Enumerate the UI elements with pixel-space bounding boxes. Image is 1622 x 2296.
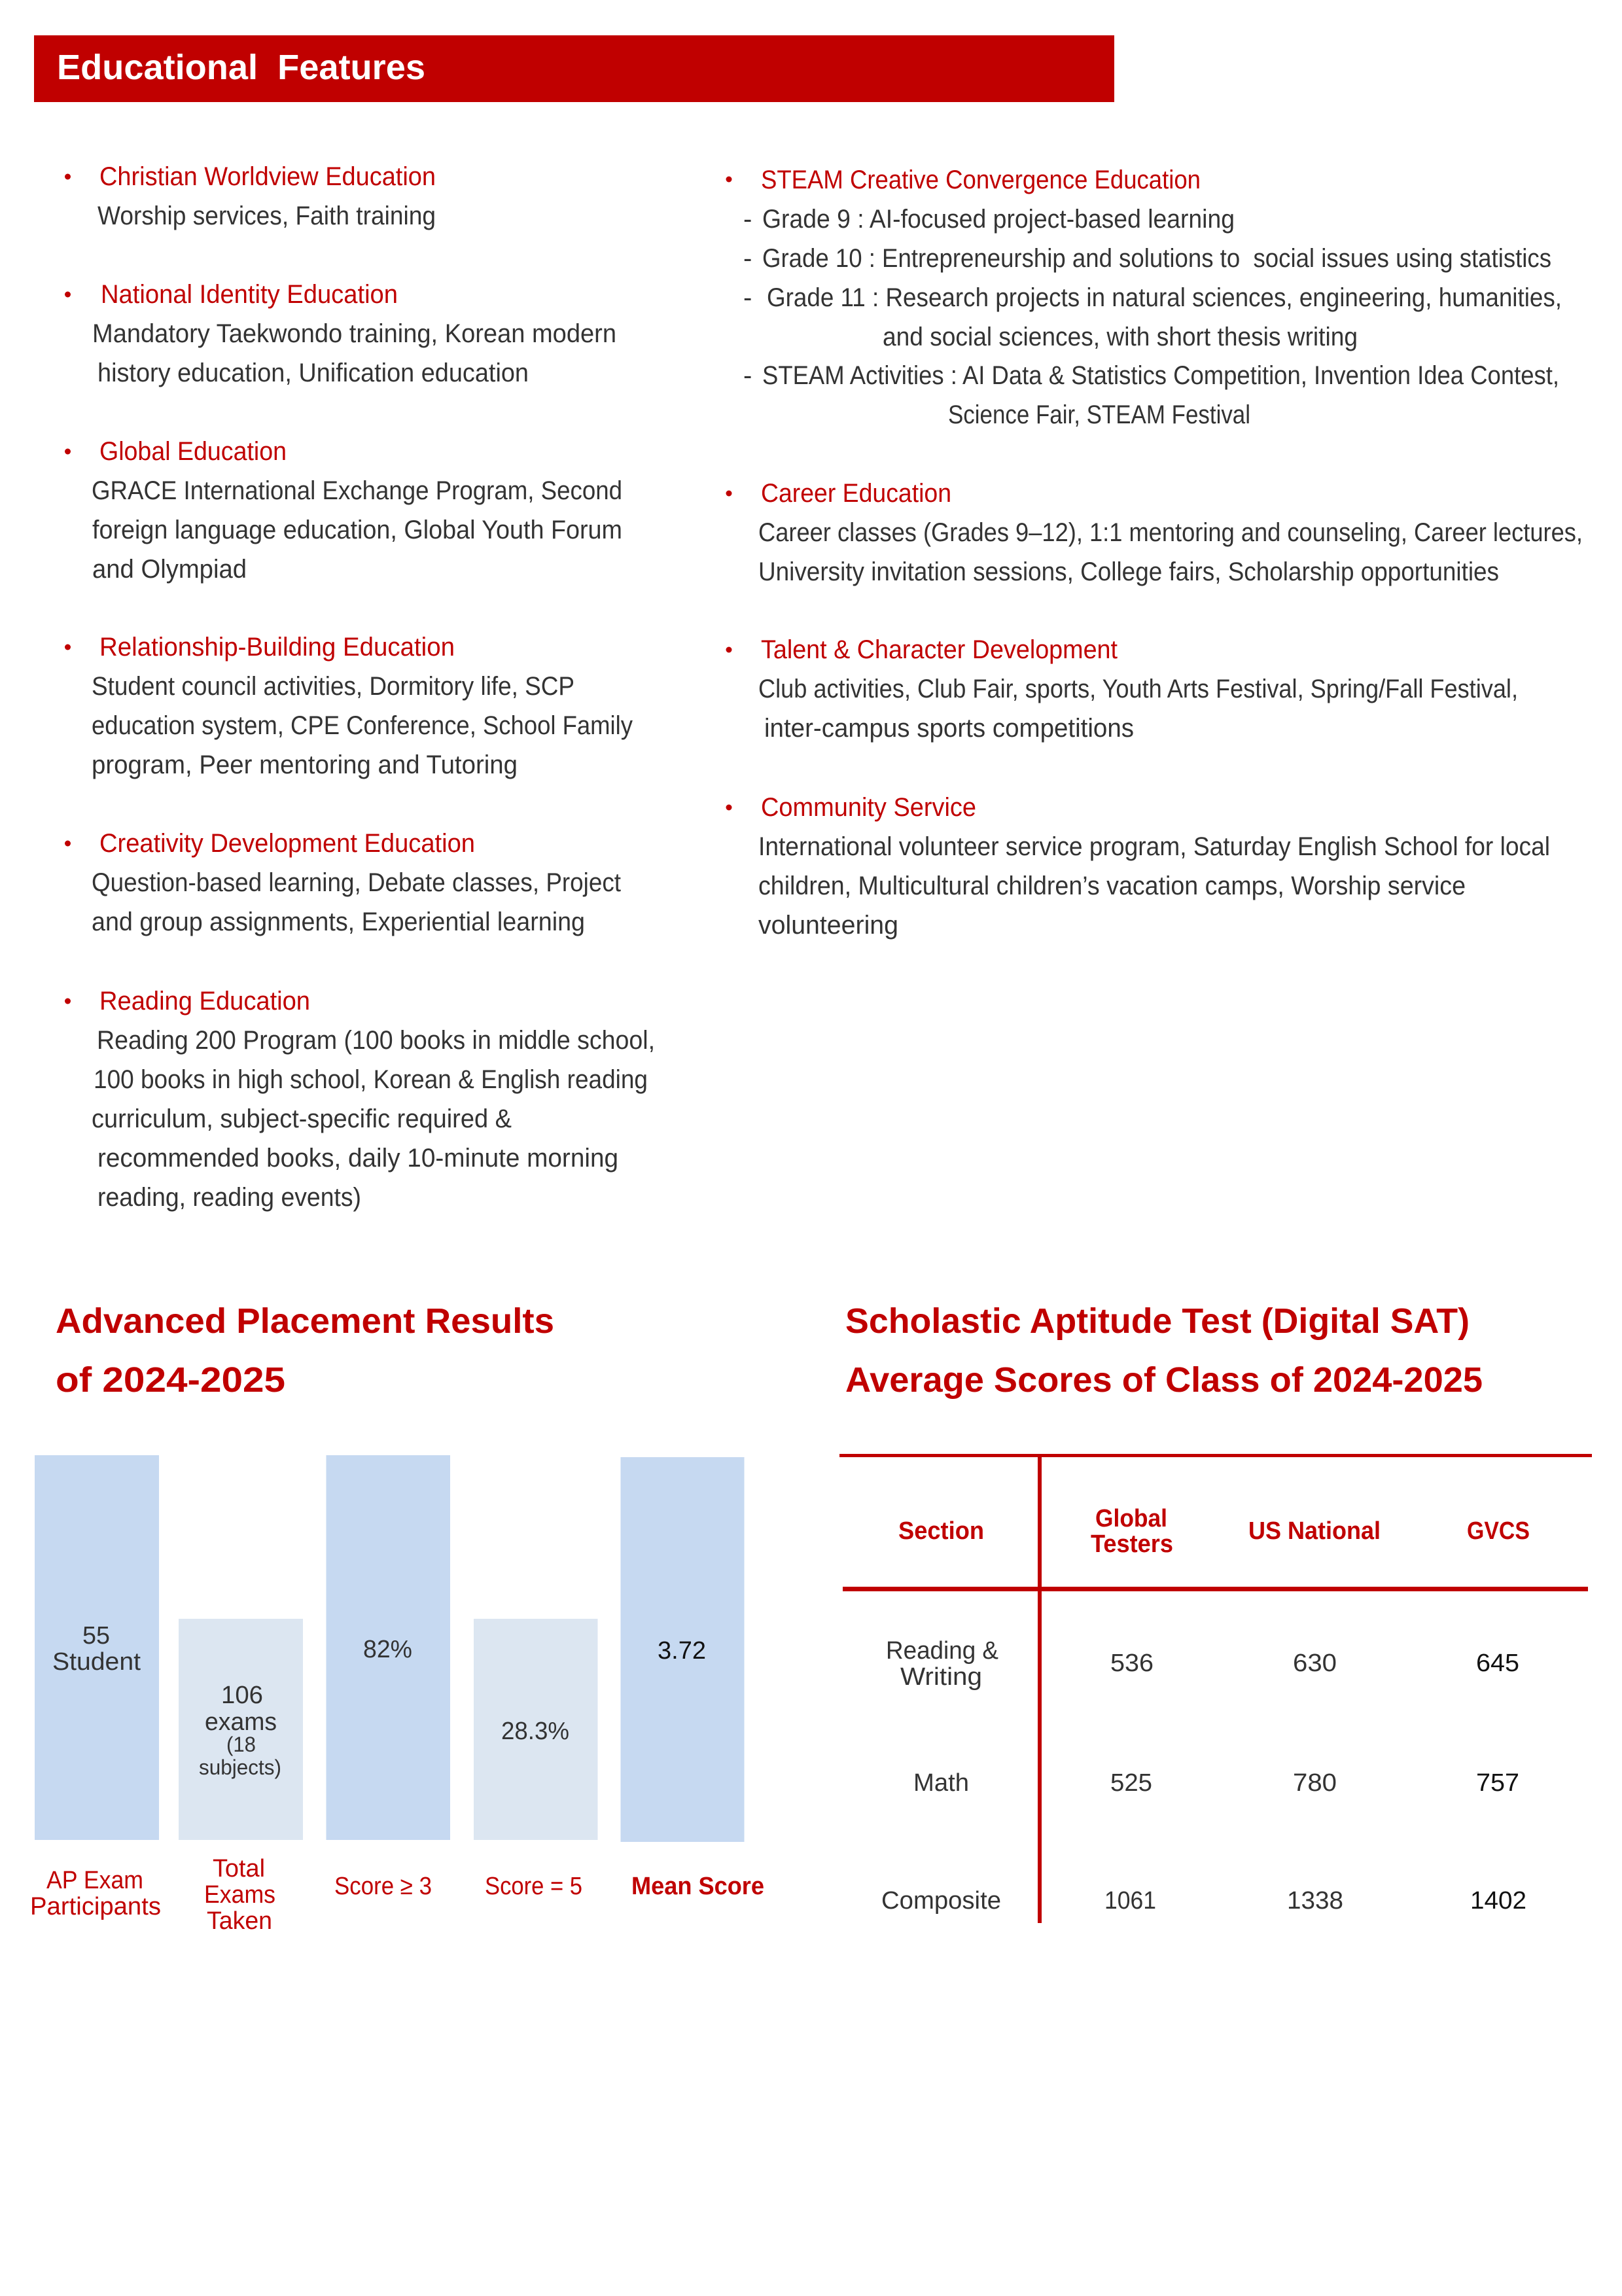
feature: STEAM Creative Convergence Education: -: [743, 283, 752, 312]
feature: STEAM Creative Convergence Education: -: [743, 244, 752, 273]
heading: Advanced Placement Results: [56, 1301, 554, 1400]
feature: STEAM Creative Convergence Education: -: [743, 205, 752, 234]
feature: Relationship-Building Education: program, Peer mentoring and Tutoring: [92, 751, 518, 779]
feature: Creativity Development Education: [65, 829, 621, 936]
feature: Creativity Development Education: Question-based learning, Debate classes, Project: [92, 868, 621, 897]
title banner: [34, 35, 1114, 102]
feature: Talent & Character Development: [726, 635, 1518, 743]
panel: right column of features: [726, 166, 1583, 940]
row: Math: [913, 1769, 1519, 1797]
feature: STEAM Creative Convergence Education: STEAM Activities : AI Data & Statistics Competition, Invention Idea Contest,: [762, 361, 1559, 390]
feature: Career Education: University invitation sessions, College fairs, Scholarship opportunities: [758, 557, 1499, 586]
panel: Advanced Placement results: [30, 1301, 764, 1935]
feature: Creativity Development Education: and group assignments, Experiential learning: [92, 908, 585, 936]
feature: Global Education: Global Education: [99, 437, 287, 466]
bar: Score at least 3: [326, 1455, 450, 1900]
bar: Score equals 5: 28.3%: [501, 1718, 569, 1745]
row: Reading & Writing: 645: [1476, 1650, 1519, 1677]
row: Composite: Composite: [881, 1887, 1001, 1915]
feature: Talent & Character Development: inter-campus sports competitions: [764, 714, 1134, 743]
feature: Career Education: [726, 479, 1583, 586]
feature: Creativity Development Education: Creativity Development Education: [99, 829, 475, 858]
row: Composite: 1338: [1287, 1887, 1343, 1915]
bar: Total Exams Taken: Exams: [204, 1881, 275, 1909]
feature: Christian Worldview Education: Worship services, Faith training: [97, 202, 436, 230]
feature: Talent & Character Development: Club activities, Club Fair, sports, Youth Arts Festival, Spring/Fall Festival,: [758, 675, 1518, 703]
bar: Total Exams Taken: exams: [205, 1708, 277, 1736]
feature: Christian Worldview Education: Christian Worldview Education: [99, 162, 436, 191]
feature: STEAM Creative Convergence Education: and social sciences, with short thesis writing: [883, 323, 1358, 351]
row: Math: 757: [1476, 1769, 1519, 1797]
feature: Global Education: GRACE International Exchange Program, Second: [92, 476, 622, 505]
bar: Total Exams Taken: Taken: [207, 1907, 272, 1935]
feature: STEAM Creative Convergence Education: Grade 11 : Research projects in natural sciences, engineering, humanities,: [767, 283, 1562, 312]
feature: STEAM Creative Convergence Education: Science Fair, STEAM Festival: [948, 400, 1250, 429]
feature: Reading Education: [65, 987, 655, 1212]
feature: Career Education: Career Education: [761, 479, 951, 508]
row: Math: Math: [913, 1769, 969, 1797]
feature: Relationship-Building Education: education system, CPE Conference, School Family: [92, 711, 633, 740]
feature: Reading Education: recommended books, daily 10-minute morning: [97, 1144, 618, 1173]
heading: Advanced Placement Results: Advanced Placement Results: [56, 1301, 554, 1341]
feature: STEAM Creative Convergence Education: -: [743, 361, 752, 390]
row: Composite: [881, 1887, 1526, 1915]
bar chart: [30, 1455, 764, 1935]
bar: AP Exam Participants: AP Exam: [46, 1867, 143, 1894]
row: Reading & Writing: Reading &: [886, 1637, 998, 1665]
row: Reading & Writing: 630: [1293, 1650, 1337, 1677]
feature: Reading Education: curriculum, subject-specific required &: [92, 1104, 512, 1133]
table header row: Section: [898, 1517, 984, 1545]
bar: Total Exams Taken: [179, 1619, 303, 1935]
feature: Community Service: [726, 793, 1550, 940]
feature: Reading Education: 100 books in high school, Korean & English reading: [94, 1065, 648, 1094]
feature: Talent & Character Development: Talent & Character Development: [761, 635, 1118, 664]
score table: [839, 1454, 1592, 1923]
row: Math: 525: [1110, 1769, 1152, 1797]
feature: Community Service: volunteering: [758, 911, 898, 940]
heading: Scholastic Aptitude Test: [845, 1301, 1483, 1400]
bar: Score equals 5: [474, 1619, 598, 1900]
bar: Score at least 3: Score ≥ 3: [334, 1873, 432, 1900]
row: Reading & Writing: Writing: [900, 1663, 982, 1691]
bar: AP Exam Participants: 55: [82, 1622, 110, 1650]
feature: National Identity Education: Mandatory Taekwondo training, Korean modern: [92, 319, 616, 348]
bar: Total Exams Taken: subjects): [199, 1756, 281, 1779]
table header row: US National: [1248, 1517, 1381, 1545]
feature: STEAM Creative Convergence Education: Grade 9 : AI-focused project-based learning: [762, 205, 1235, 234]
panel: SAT scores: [839, 1301, 1592, 1923]
bar: Mean Score: [620, 1457, 764, 1900]
bar: Score equals 5: Score = 5: [485, 1873, 582, 1900]
table header row: GVCS: [1467, 1517, 1530, 1545]
table header row: Testers: [1091, 1530, 1173, 1558]
feature: Christian Worldview Education: [65, 162, 436, 230]
feature: Global Education: foreign language education, Global Youth Forum: [92, 516, 622, 544]
feature: Relationship-Building Education: Student council activities, Dormitory life, SCP: [92, 672, 574, 701]
feature: Community Service: International volunteer service program, Saturday English School for local: [758, 832, 1550, 861]
panel: left column of features: [65, 162, 655, 1212]
table header row: Global: [1095, 1505, 1167, 1532]
feature: Relationship-Building Education: [65, 633, 633, 779]
bar: AP Exam Participants: [30, 1455, 161, 1920]
row: Composite: 1402: [1470, 1887, 1526, 1915]
title banner: Educational Features: [57, 48, 425, 87]
feature: National Identity Education: [65, 280, 616, 387]
feature: Community Service: Community Service: [761, 793, 976, 822]
feature: Community Service: children, Multicultural children’s vacation camps, Worship service: [758, 872, 1466, 900]
bar: AP Exam Participants: Student: [52, 1648, 141, 1676]
row: Reading & Writing: 536: [1110, 1650, 1154, 1677]
bar: Score at least 3: 82%: [363, 1636, 412, 1663]
heading: Advanced Placement Results: of 2024-2025: [56, 1360, 285, 1400]
feature: Relationship-Building Education: Relationship-Building Education: [99, 633, 455, 662]
heading: Scholastic Aptitude Test: Average Scores of Class of 2024-2025: [845, 1360, 1483, 1400]
bar: Total Exams Taken: Total: [213, 1855, 265, 1882]
row: Composite: 1061: [1104, 1887, 1156, 1915]
feature: Global Education: and Olympiad: [92, 555, 247, 584]
feature: STEAM Creative Convergence Education: Grade 10 : Entrepreneurship and solutions to social issues using statistics: [762, 244, 1551, 273]
feature: National Identity Education: history education, Unification education: [97, 359, 529, 387]
feature: STEAM Creative Convergence Education: [726, 166, 1562, 429]
bar: AP Exam Participants: Participants: [30, 1893, 161, 1920]
feature: Reading Education: Reading 200 Program (100 books in middle school,: [97, 1026, 655, 1055]
feature: Global Education: [65, 437, 622, 584]
feature: Reading Education: Reading Education: [99, 987, 310, 1016]
feature: STEAM Creative Convergence Education: STEAM Creative Convergence Education: [761, 166, 1201, 194]
row: Math: 780: [1293, 1769, 1337, 1797]
feature: Reading Education: reading, reading events): [97, 1183, 361, 1212]
row: Reading & Writing: [886, 1637, 1519, 1691]
feature: National Identity Education: National Identity Education: [101, 280, 398, 309]
bar: Mean Score: Mean Score: [631, 1873, 764, 1900]
bar: Total Exams Taken: (18: [226, 1733, 256, 1756]
table header row: [898, 1505, 1530, 1558]
bar: Mean Score: 3.72: [658, 1637, 706, 1665]
heading: Scholastic Aptitude Test: Scholastic Aptitude Test (Digital SAT): [845, 1301, 1470, 1341]
bar: Total Exams Taken: 106: [221, 1682, 263, 1709]
